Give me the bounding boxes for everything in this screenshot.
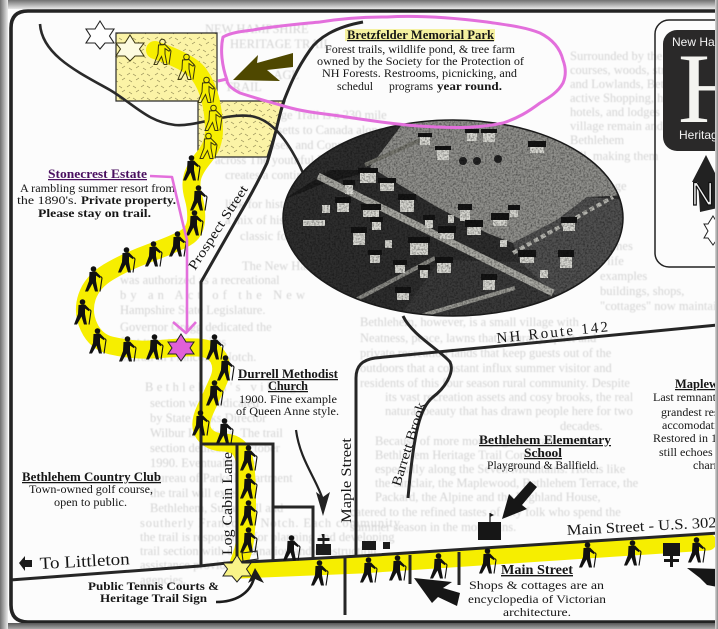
ghost text showing through from reverse side: creates a continuous	[225, 168, 326, 182]
callout: Maplewood	[653, 377, 718, 472]
ghost text showing through from reverse side: NEW HAMPSHIRE	[205, 22, 309, 36]
direction: To Littleton: To Littleton	[39, 549, 131, 573]
ghost text showing through from reverse side: grandest	[570, 224, 613, 238]
ghost text showing through from reverse side: the trail is responsible for planning and developing	[140, 530, 395, 544]
aerial town illustration in oval	[283, 118, 630, 320]
callout: Main Street: architecture.	[503, 605, 571, 619]
ghost text showing through from reverse side: Hampshire State Legislature.	[120, 303, 265, 317]
ghost text showing through from reverse side: Bethlehem	[570, 133, 624, 147]
ghost text showing through from reverse side	[120, 22, 718, 587]
callout: Durrell Methodist Church: of Queen Anne style.	[236, 404, 339, 418]
ghost text showing through from reverse side: private recreation lands that keep guests out of the	[360, 346, 612, 360]
callout: Bethlehem Elementary School: Playground & Ballfield.	[487, 458, 599, 472]
callout: Bretzfelder Memorial Park	[317, 28, 524, 93]
ghost text showing through from reverse side: hotels, and lodges	[570, 105, 660, 119]
ghost text showing through from reverse side: natural beauty that has drawn people here for two	[385, 404, 633, 418]
icon: church on Main Street	[663, 543, 680, 567]
ghost text showing through from reverse side: link for history	[225, 197, 301, 211]
callout: Bethlehem Elementary School: School	[524, 446, 563, 460]
ghost text showing through from reverse side: across The youthful New Hampshire and counties	[215, 153, 465, 167]
arrow: to Main Street shops	[414, 578, 460, 606]
road: northern curve through park	[40, 24, 303, 173]
callout: Public Tennis Courts and Heritage Trail Sign: Heritage Trail Sign	[100, 591, 207, 605]
ghost text showing through from reverse side: village remain and	[570, 119, 664, 133]
ghost text showing through from reverse side: its vast recreation assets and cosy brooks, the real	[385, 390, 634, 404]
label: Maple Street: Maple Street	[339, 438, 355, 523]
road: Prospect Street	[201, 22, 363, 566]
ghost text showing through from reverse side: southerly Franconia Notch. Each community	[140, 516, 401, 530]
ghost text showing through from reverse side: active Shopping, hiking	[570, 91, 690, 105]
callout: Public Tennis Courts and Heritage Trail Sign	[88, 579, 219, 605]
callout: Bretzfelder Memorial Park: programs	[389, 79, 433, 93]
icon: star legend	[704, 216, 718, 245]
callout: Stonecrest Estate: Please stay on trail.	[38, 206, 151, 220]
ghost text showing through from reverse side: hill, making them	[570, 149, 659, 163]
ghost text showing through from reverse side: outdoors that a constant influx summer visitor and	[360, 361, 612, 375]
callout: Bretzfelder Memorial Park: schedul	[337, 79, 374, 93]
ghost text showing through from reverse side: Wilbur La Pierre. The trail	[150, 426, 283, 440]
ghost text showing through from reverse side: 1990. Eventually, the	[150, 456, 257, 470]
ghost text showing through from reverse side: was authorized as a recreational	[120, 273, 280, 287]
callout: Stonecrest Estate: A rambling summer resort from	[20, 181, 176, 195]
ghost text showing through from reverse side: assistance provided by the state	[140, 558, 298, 572]
hikers in park, outlined	[154, 39, 222, 159]
ghost text showing through from reverse side: section dedicated October	[150, 441, 281, 455]
ghost text showing through from reverse side: agencies.	[140, 573, 186, 587]
ghost text showing through from reverse side: first twenty-six miles	[120, 335, 226, 349]
road: Main Street	[10, 533, 718, 580]
icon: six-point star outline start	[86, 21, 114, 49]
ghost text showing through from reverse side: light wood	[570, 209, 625, 223]
icon: small buildings on Main Street	[362, 541, 390, 550]
callout: Bretzfelder Memorial Park: Forest trails, wildlife pond, & tree farm	[325, 42, 516, 56]
icon: north arrow	[692, 155, 715, 212]
ghost text showing through from reverse side: especially along the Seven Mountains. Hotels like	[375, 462, 626, 476]
callout: Main Street: Shops & cottages are an	[469, 578, 604, 592]
yellow hiking trail route	[85, 50, 247, 568]
ghost text showing through from reverse side: courses, woods, streams	[570, 63, 691, 77]
ghost text showing through from reverse side: by State Parks Director	[150, 411, 267, 425]
callout: Durrell Methodist Church	[236, 367, 339, 418]
callout: Main Street: encyclopedia of Victorian	[468, 592, 606, 606]
callout: Durrell Methodist Church: Durrell Methodist	[238, 367, 339, 381]
ghost text showing through from reverse side: Bethlehem, however, is a small village with	[360, 315, 580, 329]
park boundary: Bretzfelder Memorial Park	[116, 33, 285, 157]
ghost text showing through from reverse side: long been	[570, 194, 620, 208]
ghost text showing through from reverse side: the trail will extend	[150, 486, 248, 500]
callout: Bethlehem Country Club: Bethlehem Country Club	[22, 470, 161, 484]
ghost text showing through from reverse side: the Sinclair, the Maplewood, Bethlehem Terrace, the	[375, 476, 639, 490]
arrow: to Maplewood section	[687, 568, 715, 586]
callout: Bethlehem Country Club: Town-owned golf course,	[29, 482, 153, 496]
ghost text showing through from reverse side: catered to the refined tastes of city folk who spend the	[350, 505, 621, 519]
arrow: to tennis courts	[216, 568, 264, 602]
pink hand-drawn oval around Bretzfelder callout	[218, 16, 565, 128]
arrow: to school	[502, 481, 537, 519]
ghost text showing through from reverse side: buildings, shops,	[600, 284, 684, 298]
icon: trail sign	[242, 551, 258, 561]
icon: Durrell church	[316, 534, 331, 555]
callout: Stonecrest Estate: Stonecrest Estate	[48, 167, 147, 181]
icon: start star at tennis courts	[223, 555, 251, 582]
ghost text showing through from reverse side: Bethlehem, Sugar Hill and	[150, 501, 284, 515]
label: Main Street - U.S. 302: Main Street - U.S. 302	[566, 515, 717, 539]
hikers along trail, black	[74, 155, 705, 585]
road: Log Cabin Lane block	[201, 444, 313, 563]
pink leader arrow from Stonecrest to star	[150, 176, 196, 333]
callout: Stonecrest Estate	[17, 167, 176, 220]
ghost text showing through from reverse side: TRAIL	[225, 80, 262, 94]
ghost text showing through from reverse side: Neatness, peace, lawns that naturally, quiet and	[360, 331, 597, 345]
ghost text showing through from reverse side: decades.	[560, 419, 603, 433]
callout: Bethlehem Country Club	[22, 470, 161, 509]
callout: Bethlehem Elementary School	[479, 433, 612, 472]
arrow: pointing to park	[233, 53, 293, 81]
label: Prospect Street: Prospect Street	[185, 182, 251, 273]
callout: Public Tennis Courts and Heritage Trail Sign: Public Tennis Courts &	[88, 579, 219, 593]
ghost text showing through from reverse side: The village	[570, 179, 627, 193]
icon: six-point star in park	[116, 35, 144, 61]
label: NH Route 142: NH Route 142	[496, 319, 609, 347]
callout: Stonecrest Estate: the 1890's.	[17, 193, 77, 207]
ghost text showing through from reverse side: section was dedicated	[150, 396, 260, 410]
ghost text showing through from reverse side: HERITAGE TRAIL	[230, 37, 331, 51]
ghost text showing through from reverse side: by an Act of the New	[120, 288, 305, 302]
ghost text showing through from reverse side: Bethlehem Heritage Trail Committee	[375, 448, 561, 462]
callout: Main Street: Main Street	[501, 563, 573, 578]
ghost text showing through from reverse side: examples	[600, 269, 647, 283]
panel: Heritage Trail sign	[655, 20, 718, 267]
callout: Durrell Methodist Church: Church	[268, 379, 308, 393]
road: Barrett Brook	[403, 316, 451, 498]
ghost text showing through from reverse side: Governor Gregg dedicated the	[120, 320, 272, 334]
ghost text showing through from reverse side: from Massachusetts to Canada along	[200, 123, 385, 137]
label: Barrett Brook: Barrett Brook	[389, 400, 428, 488]
callout: Durrell Methodist Church: 1900. Fine example	[239, 392, 337, 406]
ghost text showing through from reverse side: Because of more money, guests came to the	[375, 434, 594, 448]
ghost text showing through from reverse side: Bethlehem's village	[145, 380, 305, 394]
ghost text showing through from reverse side: summer season in the mountains.	[350, 520, 516, 534]
ghost text showing through from reverse side: Surrounded by the mountains,	[570, 49, 718, 63]
ghost text showing through from reverse side: trail section with coordination and construction	[140, 544, 377, 558]
callout: Bretzfelder Memorial Park: year round.	[437, 79, 502, 93]
arrow: to church	[296, 430, 330, 516]
callout: Bretzfelder Memorial Park: owned by the Society for the Protection of	[317, 54, 524, 68]
label: Log Cabin Lane: Log Cabin Lane	[220, 452, 236, 555]
ghost text showing through from reverse side: classic form	[240, 229, 301, 243]
road: southern side streets	[345, 552, 459, 615]
ghost text showing through from reverse side: of trail in Franconia Notch.	[120, 350, 256, 364]
callout: Bethlehem Elementary School: Bethlehem Elementary	[479, 433, 612, 447]
yellow trail along Main Street	[240, 542, 708, 570]
ghost text showing through from reverse side: a mix of history, nature	[225, 213, 342, 227]
ghost text showing through from reverse side: The Heritage Trail is a 230 mile	[227, 108, 387, 122]
ghost text showing through from reverse side: the Pemigewasset, and Connecticut	[200, 138, 378, 152]
ghost text showing through from reverse side: village life	[570, 254, 624, 268]
ghost text showing through from reverse side: VILLAGE	[245, 68, 300, 82]
road: NH Route 142 and Maple Street	[356, 325, 718, 556]
icon: north arrow: N	[691, 176, 714, 212]
ghost text showing through from reverse side: residents of this four season rural community. Despite	[360, 376, 630, 390]
icon: school building	[478, 513, 501, 540]
ghost text showing through from reverse side: Bureau of Parks Department	[150, 471, 293, 485]
callout: Bethlehem Country Club: open to public.	[54, 495, 127, 509]
callout: Bretzfelder Memorial Park: NH Forests. Restrooms, picnicking, and	[322, 66, 517, 80]
callout: Bretzfelder Memorial Park: Bretzfelder Memorial Park	[347, 28, 494, 42]
ghost text showing through from reverse side: Packard, the Alpine and the Highland House,	[375, 490, 601, 504]
ghost text showing through from reverse side: The New Hampshire Heritage Trail	[242, 259, 420, 273]
callout: Main Street	[468, 563, 606, 619]
icon: pink six-point star	[168, 334, 194, 361]
callout: Stonecrest Estate: Private property.	[81, 193, 176, 207]
ghost text showing through from reverse side: street scenes	[570, 239, 633, 253]
ghost text showing through from reverse side: and Lowlands, Bethlehem	[570, 77, 701, 91]
